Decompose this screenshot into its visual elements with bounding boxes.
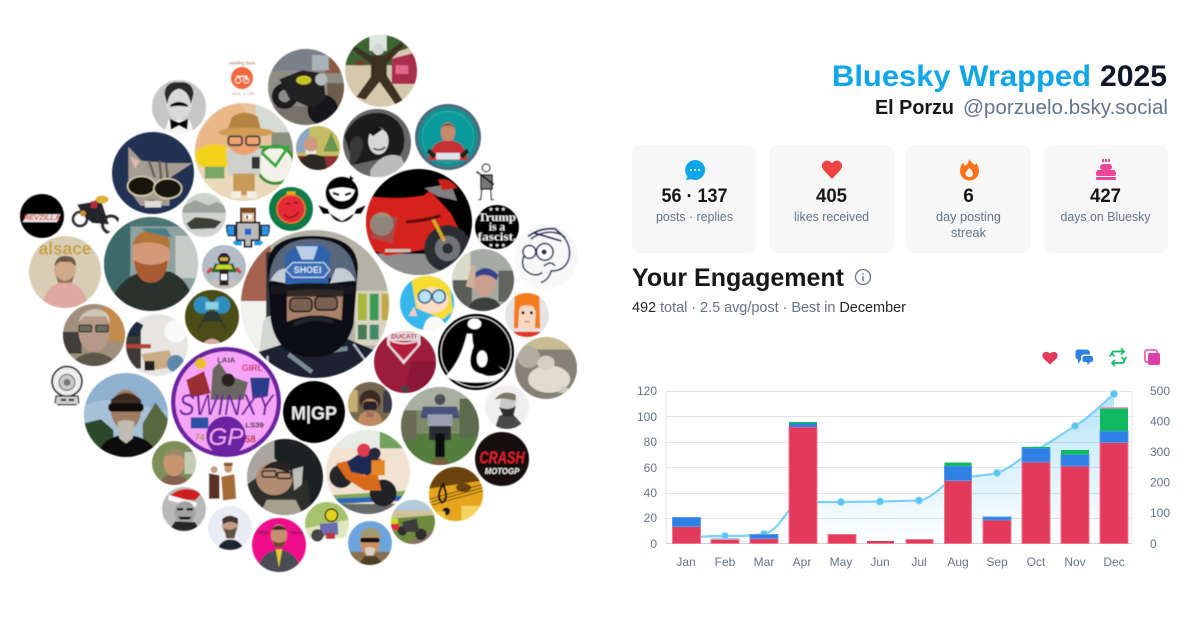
icon: flame [960, 159, 979, 180]
avatar: ink sketch head [514, 225, 578, 289]
avatar: person in a car [452, 249, 514, 311]
right axis labels [1150, 384, 1170, 551]
avatar: alien astronaut [45, 363, 89, 407]
chart: monthly engagement [637, 384, 1170, 569]
x axis labels: Oct [1027, 555, 1046, 569]
avatar: crash motogp: MOTOGP [485, 466, 519, 476]
avatar: film reel music [429, 467, 483, 521]
profile name and handle: @porzuelo.bsky.social [963, 97, 1168, 119]
avatar: man in hat and sunglasses [348, 521, 392, 565]
avatar: sunglasses man with grey beard [84, 373, 168, 457]
avatar: white dogs [515, 337, 578, 399]
avatar: anti-fascist badge: fascist. [478, 232, 517, 244]
icon: speech bubble [685, 160, 705, 180]
avatar: racer on teal [415, 104, 481, 170]
x axis labels: Jun [870, 555, 890, 569]
left axis labels: 60 [644, 461, 657, 475]
avatar: adventure bike jump [401, 387, 479, 465]
left axis labels [637, 384, 657, 551]
avatar: christmas photo man [296, 126, 340, 170]
right axis labels: 400 [1150, 414, 1170, 428]
x axis labels: Aug [947, 555, 969, 569]
cumulative area and line [686, 390, 1118, 544]
avatar: black motorcycle [268, 49, 344, 125]
avatar: costumed couple [201, 460, 245, 504]
profile name and handle: El Porzu [875, 97, 954, 119]
avatar cluster [20, 35, 578, 572]
avatar: swinxy gp: SWINXY [179, 389, 275, 422]
avatar: smiling man [152, 441, 196, 485]
avatar: ducati logo: DUCATI [391, 333, 416, 340]
avatar: swinxy gp: LAIA [217, 355, 236, 364]
x axis labels: Nov [1064, 555, 1086, 569]
x axis labels: Sep [986, 555, 1008, 569]
x axis labels: Dec [1103, 555, 1125, 569]
right axis labels: 0 [1150, 537, 1157, 551]
stat label: posts · replies [656, 209, 733, 224]
avatar: anti-fascist badge [475, 205, 519, 249]
avatar: red superbike [366, 169, 472, 275]
avatar: crash motogp: CRASH [479, 447, 525, 467]
icon: cake [1096, 159, 1116, 180]
avatar: older man with glasses [63, 304, 125, 366]
avatar: pink background speaker: Totally [257, 530, 270, 535]
stacked bars [672, 407, 1128, 544]
stat value: 56 · 137 [662, 186, 728, 207]
avatar: bearded man in profile [208, 506, 252, 550]
avatar: ninja [317, 172, 367, 222]
stat label: likes received [794, 209, 869, 224]
avatar: main helmet selfie [241, 230, 389, 378]
panel: day posting streak: streak [951, 225, 986, 240]
avatar: animal crossing character [195, 103, 294, 201]
avatar: woman with helmet [348, 382, 392, 426]
panel: posts and replies [632, 145, 757, 253]
avatar: man with cap [485, 385, 529, 429]
right axis labels: 300 [1150, 445, 1170, 459]
avatar: man with cat [247, 439, 323, 515]
avatar: dark logo: REVZILLA [24, 213, 60, 222]
x axis labels: Jan [676, 555, 696, 569]
avatar: motogp wheelie [326, 430, 410, 514]
grid lines [666, 391, 1132, 544]
avatar: misty lake [182, 193, 226, 237]
avatar: groucho with santa hat [162, 487, 206, 531]
stat label: day posting [936, 209, 1001, 224]
avatar: swinxy gp: GIRL [242, 363, 264, 373]
avatar: swinxy gp: 58 [245, 435, 256, 446]
avatar: anti-fascist badge: Trump [478, 212, 516, 224]
avatar: pixel robot [226, 205, 270, 249]
heading: your engagement: Your Engagement [632, 264, 845, 292]
avatar: dark logo [20, 194, 64, 238]
left axis labels: 0 [650, 537, 657, 551]
icon: info [856, 270, 870, 284]
avatar: soldier sketch [476, 162, 495, 201]
icon: likes heart [1042, 352, 1058, 364]
avatar: yellow motorcycle [70, 194, 120, 234]
avatar: swinxy gp: LS39 [245, 420, 264, 429]
left axis labels: 40 [644, 486, 657, 500]
avatar: main helmet selfie: SHOEI [294, 265, 321, 275]
avatar: ia logo [438, 314, 514, 390]
avatar: swinxy gp [171, 347, 281, 457]
icon: reposts arrows [1110, 348, 1126, 366]
x axis labels: Feb [715, 555, 736, 569]
engagement summary: 492 total · 2.5 avg/post · Best in December [632, 300, 906, 316]
icon: heart [822, 161, 842, 179]
avatar: green christmas ornament [269, 187, 313, 231]
left axis labels: 20 [644, 511, 657, 525]
x axis labels: Mar [754, 555, 774, 569]
panel: days on Bluesky [1043, 145, 1168, 253]
avatar: man with red beard [104, 217, 198, 311]
title: Bluesky Wrapped [832, 60, 1091, 93]
stat value: 6 [963, 186, 974, 207]
avatar: travel logo: Traveling Bucks [226, 60, 258, 65]
icon: quotes squares [1145, 350, 1160, 365]
avatar: orange haired cartoon [505, 292, 549, 337]
left axis labels: 120 [637, 384, 657, 398]
stat value: 405 [816, 186, 847, 207]
right axis labels: 500 [1150, 384, 1170, 398]
avatar: swinxy gp: 74 [195, 432, 205, 443]
avatar: pink background speaker [252, 518, 306, 572]
x axis labels: May [830, 555, 852, 569]
left axis labels: 100 [637, 410, 657, 424]
avatar: swinxy gp: GP [209, 424, 243, 451]
avatar: travel logo: Live Life [228, 91, 256, 96]
avatar: crash motogp [475, 432, 529, 486]
right axis labels: 100 [1150, 506, 1170, 520]
chart legend [1042, 348, 1160, 366]
avatar: MGP: M|GP [291, 402, 337, 423]
avatar: MGP [283, 381, 345, 443]
stat value: 427 [1090, 186, 1121, 207]
stat label: days on Bluesky [1060, 209, 1151, 224]
avatar: alsace drawing [29, 236, 101, 308]
avatar: person jumping [345, 35, 417, 107]
right axis labels: 200 [1150, 476, 1170, 490]
avatar: travel logo [227, 60, 257, 96]
profile name and handle [875, 97, 1168, 119]
panel: likes received [769, 145, 894, 253]
avatar: vintage actress [343, 109, 411, 177]
avatar: moustached man [152, 80, 206, 134]
avatar: ducati logo [374, 331, 436, 393]
avatar: anti-fascist badge: is a [489, 222, 505, 234]
left axis labels: 80 [644, 435, 657, 449]
avatar: dragonfly [185, 290, 239, 344]
avatar: pink background speaker: Tubular [289, 530, 304, 535]
avatar: alsace drawing: alsace [39, 239, 92, 259]
x axis labels: Apr [793, 555, 811, 569]
avatar: motorcycle on road [391, 500, 435, 544]
x axis labels [676, 555, 1125, 569]
avatar: anti-fascist badge: ★ ★ ★ [488, 243, 506, 249]
title: 2025 [1100, 60, 1167, 93]
avatar: motocross rider [202, 245, 246, 289]
avatar: anti-fascist badge: ★ ★ ★ [488, 207, 506, 213]
avatar: workshop [126, 314, 188, 376]
avatar: sunglasses cat [112, 132, 194, 214]
avatar: blonde cartoon [400, 276, 454, 330]
icon: replies bubbles [1076, 350, 1093, 365]
panel: day posting streak [906, 145, 1031, 253]
avatar: cartoon motorcyclist [305, 502, 349, 546]
x axis labels: Jul [911, 555, 927, 569]
